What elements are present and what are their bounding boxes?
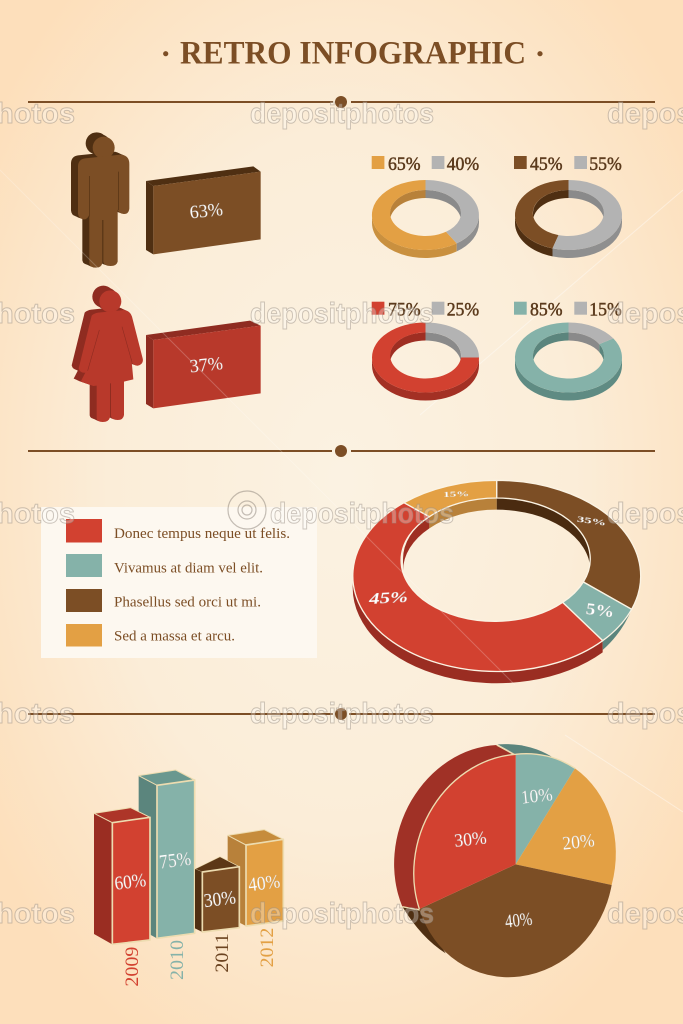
bar: 63 percent box: 63%: [189, 199, 224, 224]
watermarks: depositphotos: [250, 898, 434, 930]
bar: 2012: 40%: [247, 871, 281, 896]
chart: large donut: [353, 480, 641, 683]
donut: brown and grey: [515, 180, 622, 258]
chart: 3D bars: [94, 770, 283, 987]
label: 35 percent: 35%: [576, 514, 607, 528]
donut legend: 85 and 15 percent: 85%: [530, 300, 563, 321]
label: 5 percent: 5%: [585, 599, 615, 621]
donut legend: 45 and 55 percent: 45%: [530, 154, 563, 175]
watermarks: depositphotos: [270, 498, 454, 530]
label: 10 percent: 10%: [520, 784, 554, 809]
legend item: teal: Vivamus at diam vel elit.: [114, 561, 263, 577]
title: RETRO INFOGRAPHIC: [180, 35, 526, 71]
diagonal light streak over charts: [0, 170, 515, 685]
divider: lower: [28, 708, 655, 720]
bar: 37 percent box: 37%: [189, 353, 224, 378]
legend item: red: Donec tempus neque ut felis.: [114, 526, 290, 542]
bar: 37 percent box: [146, 321, 261, 408]
bar: 2011: 30%: [203, 887, 237, 912]
bar: 2010: 75%: [158, 848, 192, 874]
label: 15 percent: 15%: [443, 490, 469, 499]
label: year 2009: 2009: [122, 947, 143, 987]
donut legend: 75 and 25 percent: [372, 300, 479, 321]
bar: 2009: 60%: [113, 869, 147, 895]
legend item: teal: [66, 554, 263, 577]
label: 20 percent: 20%: [561, 830, 596, 855]
legend item: red: [66, 519, 290, 542]
label: 30 percent: 30%: [453, 828, 488, 852]
donut legend: 45 and 55 percent: [514, 154, 622, 175]
legend item: orange: [66, 624, 235, 646]
panel: legend: [41, 507, 317, 658]
donut legend: 45 and 55 percent: 55%: [589, 154, 622, 175]
donut: orange and grey: [372, 180, 479, 258]
label: year 2012: 2012: [257, 928, 278, 967]
chart: 3D pie: [394, 744, 616, 977]
legend item: brown: [66, 589, 261, 612]
background light streaks: [420, 190, 683, 812]
label: 45 percent: 45%: [367, 588, 408, 608]
donut legend: 85 and 15 percent: 15%: [589, 300, 622, 321]
legend item: brown: Phasellus sed orci ut mi.: [114, 595, 261, 611]
donut: red and grey: [372, 322, 479, 400]
label: 40 percent: 40%: [504, 909, 533, 933]
donut: teal and grey: [515, 322, 622, 400]
bar: 2012: [228, 830, 283, 926]
donut legend: 75 and 25 percent: 25%: [447, 300, 479, 321]
donut legend: 65 and 40 percent: 65%: [388, 154, 421, 175]
donut legend: 65 and 40 percent: [372, 154, 479, 175]
watermarks: depositphotos: [250, 98, 434, 130]
icon: man: [71, 132, 129, 268]
icon: woman: [72, 286, 143, 422]
bar: 2011: [195, 857, 239, 932]
label: year 2011: 2011: [212, 933, 233, 973]
bar: 63 percent box: [146, 166, 261, 254]
legend item: orange: Sed a massa et arcu.: [114, 629, 235, 645]
donut legend: 75 and 25 percent: 75%: [388, 300, 421, 321]
watermarks: depositphotos: [250, 698, 434, 730]
label: year 2010: 2010: [167, 940, 188, 980]
bar: 2010: [139, 770, 195, 938]
bar: 2009: [94, 808, 150, 944]
watermarks: depositphotos: [250, 298, 434, 330]
divider: middle: [28, 445, 655, 457]
donut legend: 85 and 15 percent: [514, 300, 622, 321]
divider: top: [28, 96, 655, 108]
donut legend: 65 and 40 percent: 40%: [447, 154, 479, 175]
